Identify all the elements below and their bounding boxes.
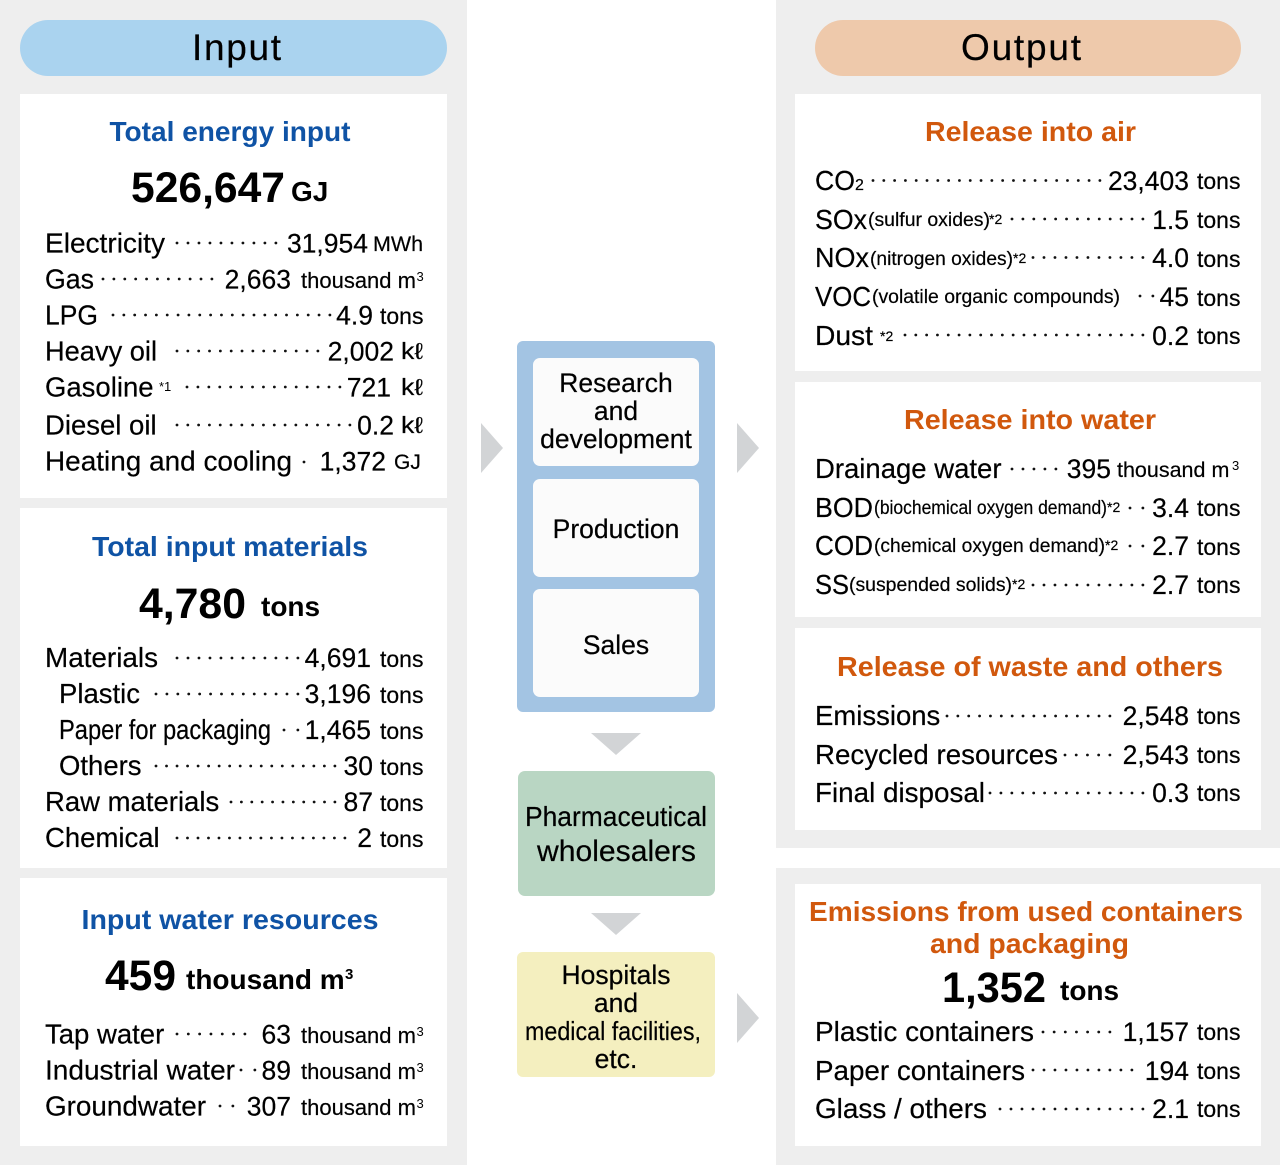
row: tap water: 63	[262, 1020, 291, 1050]
row: chemical: tons	[380, 826, 423, 852]
row: SOx: tons	[1197, 207, 1240, 233]
row: VOC	[815, 281, 1240, 312]
row: NOx: 4.0	[1152, 243, 1189, 273]
row: gasoline: Gasoline	[45, 372, 154, 402]
box: pharmaceutical wholesalers	[518, 771, 715, 896]
heading: input water resources: Input water resources	[82, 904, 378, 935]
row: heavy oil: 2,002	[328, 336, 394, 366]
row: gas	[45, 264, 424, 294]
box: sales	[533, 589, 699, 697]
row: BOD: tons	[1197, 495, 1240, 521]
arrow: business to output	[737, 423, 759, 473]
panel: company activities	[517, 341, 715, 712]
row: COD: COD	[815, 530, 873, 561]
heading: total input materials: Total input materials	[92, 531, 368, 562]
row: recycled resources: 2,543	[1123, 740, 1189, 770]
row: CO2: CO	[815, 165, 855, 196]
row: NOx: *2	[1013, 250, 1026, 266]
row: plastic containers: tons	[1197, 1019, 1240, 1045]
heading: total energy input: Total energy input	[110, 116, 350, 147]
arrow: down to wholesalers	[591, 733, 641, 755]
row: COD	[815, 530, 1240, 561]
box: research and development: and	[594, 396, 638, 426]
heading: release into water: Release into water	[904, 404, 1156, 435]
water total value: thousand m	[186, 964, 345, 995]
emissions total value	[942, 965, 1119, 1012]
heading: Input: Input	[192, 27, 282, 68]
row: dust: 0.2	[1152, 321, 1189, 351]
panel: release of waste and others	[795, 628, 1261, 830]
total energy value: 526,647	[131, 165, 285, 212]
row: COD: *2	[1105, 537, 1118, 553]
row: others	[59, 750, 423, 781]
emissions total value: 1,352	[942, 965, 1046, 1012]
row: CO2	[815, 165, 1240, 196]
row: heavy oil	[45, 336, 424, 366]
row: SS: *2	[1012, 576, 1025, 592]
panel: input water resources	[20, 878, 447, 1146]
box: hospitals and medical facilities: Hospitals	[562, 960, 670, 990]
row: CO2: 23,403	[1108, 166, 1189, 196]
box: hospitals and medical facilities: medical facilities,	[525, 1016, 701, 1046]
row: chemical: 2	[357, 823, 372, 853]
row: gas: Gas	[45, 264, 94, 294]
panel: release into air	[795, 94, 1261, 371]
row: recycled resources	[815, 739, 1240, 770]
row: SOx: SOx	[815, 204, 867, 235]
row: LPG: 4.9	[336, 300, 373, 330]
row: groundwater: Groundwater	[45, 1090, 206, 1122]
row: COD: (chemical oxygen demand)	[874, 536, 1105, 557]
row: industrial water: 89	[262, 1056, 291, 1086]
row: SS: SS	[815, 569, 849, 600]
row: heavy oil: kℓ	[401, 338, 424, 364]
water total value: 459	[105, 953, 176, 1000]
row: emissions: 2,548	[1123, 701, 1189, 731]
heading: Input	[20, 20, 447, 76]
row: VOC: (volatile organic compounds)	[872, 287, 1120, 308]
heading: Output: Output	[961, 27, 1082, 68]
row: final disposal: Final disposal	[815, 777, 985, 808]
row: gas: 3	[416, 269, 424, 284]
row: materials: tons	[380, 646, 423, 672]
row: dust: tons	[1197, 323, 1240, 349]
total materials value	[139, 581, 320, 628]
row: CO2: tons	[1197, 168, 1240, 194]
panel: input background	[0, 0, 467, 1165]
row: plastic	[59, 678, 423, 709]
row: LPG: LPG	[45, 300, 98, 330]
row: industrial water: 3	[416, 1060, 424, 1075]
row: gasoline: kℓ	[401, 374, 424, 400]
heading: release into air: Release into air	[925, 116, 1136, 147]
row: raw materials: 87	[344, 787, 373, 817]
row: industrial water	[45, 1054, 424, 1086]
row: COD: 2.7	[1152, 531, 1189, 561]
heading: emissions from used containers and packaging	[809, 896, 1243, 959]
row: others: 30	[344, 751, 373, 781]
row: electricity: MWh	[373, 233, 423, 256]
box: hospitals and medical facilities: and	[594, 988, 638, 1018]
row: recycled resources: tons	[1197, 742, 1240, 768]
row: glass / others: 2.1	[1152, 1094, 1189, 1124]
row: groundwater	[45, 1090, 424, 1122]
row: SS: 2.7	[1152, 570, 1189, 600]
row: chemical	[45, 822, 423, 853]
heading: emissions from used containers and packaging: and packaging	[930, 928, 1129, 959]
row: tap water: Tap water	[45, 1018, 164, 1050]
row: drainage water: 395	[1067, 454, 1111, 484]
row: others: tons	[380, 754, 423, 780]
row: groundwater: 307	[247, 1092, 291, 1122]
row: plastic: Plastic	[59, 678, 140, 709]
row: final disposal: 0.3	[1152, 778, 1189, 808]
row: plastic: 3,196	[305, 679, 371, 709]
box: production: Production	[553, 514, 679, 544]
row: diesel oil	[45, 410, 424, 440]
row: glass / others: Glass / others	[815, 1093, 987, 1124]
row: drainage water: thousand m	[1117, 458, 1229, 482]
row: heating and cooling	[45, 446, 421, 476]
row: diesel oil: 0.2	[357, 410, 394, 440]
row: gasoline	[45, 372, 424, 402]
row: materials: Materials	[45, 642, 158, 673]
box: hospitals and medical facilities: etc.	[595, 1044, 637, 1074]
total energy value: GJ	[291, 176, 328, 207]
row: BOD: (biochemical oxygen demand)	[874, 498, 1107, 519]
total materials value: tons	[261, 591, 320, 622]
box: research and development: development	[540, 424, 693, 454]
row: groundwater: 3	[416, 1096, 424, 1111]
row: raw materials: tons	[380, 790, 423, 816]
box: research and development: Research	[559, 368, 673, 398]
row: dust: *2	[880, 328, 893, 344]
row: paper for packaging: Paper for packaging	[59, 714, 271, 745]
row: paper for packaging: 1,465	[305, 715, 371, 745]
box: research and development	[533, 358, 699, 466]
row: VOC: tons	[1197, 285, 1240, 311]
total materials value: 4,780	[139, 581, 246, 628]
row: drainage water: 3	[1232, 458, 1239, 473]
panel: release into water	[795, 382, 1261, 617]
row: SOx: (sulfur oxides)	[868, 210, 990, 231]
row: drainage water	[815, 453, 1239, 484]
row: NOx: NOx	[815, 242, 869, 273]
row: gasoline: *1	[159, 379, 171, 394]
arrow: down to hospitals	[591, 913, 641, 935]
row: SS: tons	[1197, 572, 1240, 598]
row: plastic containers	[815, 1016, 1240, 1047]
water total value: 3	[345, 966, 353, 983]
row: NOx: (nitrogen oxides)	[870, 249, 1013, 270]
row: BOD	[815, 492, 1240, 523]
row: NOx: tons	[1197, 246, 1240, 272]
row: NOx	[815, 242, 1240, 273]
row: VOC: VOC	[815, 281, 871, 312]
box: hospitals and medical facilities	[517, 952, 715, 1077]
row: glass / others	[815, 1093, 1240, 1124]
row: heating and cooling: 1,372	[320, 446, 386, 476]
row: BOD: *2	[1107, 499, 1120, 515]
row: paper containers: tons	[1197, 1058, 1240, 1084]
panel: emissions background	[776, 868, 1280, 1165]
heading: release of waste and others: Release of waste and others	[837, 651, 1223, 682]
row: SOx: *2	[989, 211, 1002, 227]
row: emissions: Emissions	[815, 700, 940, 731]
row: paper containers	[815, 1055, 1240, 1086]
row: others: Others	[59, 750, 142, 781]
row: COD: tons	[1197, 534, 1240, 560]
row: paper containers: Paper containers	[815, 1055, 1025, 1086]
row: recycled resources: Recycled resources	[815, 739, 1058, 770]
row: VOC: 45	[1160, 282, 1189, 312]
row: electricity	[45, 228, 423, 258]
row: chemical: Chemical	[45, 822, 160, 853]
row: SOx	[815, 204, 1240, 235]
heading: emissions from used containers and packaging: Emissions from used containers	[809, 896, 1243, 927]
row: tap water	[45, 1018, 424, 1050]
row: final disposal	[815, 777, 1240, 808]
row: SS: (suspended solids)	[849, 575, 1012, 596]
emissions total value: tons	[1060, 975, 1119, 1006]
row: diesel oil: kℓ	[401, 412, 424, 438]
box: production	[533, 479, 699, 577]
panel: total energy input	[20, 94, 447, 498]
row: electricity: 31,954	[287, 228, 368, 258]
row: materials: 4,691	[305, 643, 371, 673]
row: materials	[45, 642, 423, 673]
row: glass / others: tons	[1197, 1096, 1240, 1122]
row: paper for packaging	[59, 714, 423, 745]
row: paper for packaging: tons	[380, 718, 423, 744]
panel: total input materials	[20, 508, 447, 868]
heading: Output	[815, 20, 1241, 76]
row: heating and cooling: Heating and cooling	[45, 446, 292, 476]
row: gasoline: 721	[347, 372, 391, 402]
row: plastic containers: Plastic containers	[815, 1016, 1034, 1047]
arrow: hospitals to emissions	[737, 993, 759, 1043]
row: paper containers: 194	[1145, 1056, 1189, 1086]
row: drainage water: Drainage water	[815, 453, 1001, 484]
row: BOD: BOD	[815, 492, 873, 523]
box: pharmaceutical wholesalers: wholesalers	[536, 835, 696, 868]
row: gas: thousand m	[301, 268, 416, 293]
row: industrial water: thousand m	[301, 1059, 416, 1084]
row: emissions	[815, 700, 1240, 731]
row: dust	[815, 320, 1240, 351]
arrow: input to business	[481, 423, 503, 473]
panel: emissions from used containers and packaging	[795, 884, 1261, 1146]
row: industrial water: Industrial water	[45, 1054, 235, 1086]
row: plastic: tons	[380, 682, 423, 708]
row: final disposal: tons	[1197, 780, 1240, 806]
box: sales: Sales	[583, 630, 649, 660]
row: SOx: 1.5	[1152, 205, 1189, 235]
row: BOD: 3.4	[1152, 493, 1189, 523]
row: tap water: thousand m	[301, 1023, 416, 1048]
water total value	[105, 953, 353, 1000]
row: electricity: Electricity	[45, 228, 165, 258]
row: heavy oil: Heavy oil	[45, 336, 157, 366]
row: LPG	[45, 300, 423, 330]
row: LPG: tons	[380, 303, 423, 329]
row: dust: Dust	[815, 320, 873, 351]
row: diesel oil: Diesel oil	[45, 410, 157, 440]
row: groundwater: thousand m	[301, 1095, 416, 1120]
row: heating and cooling: GJ	[394, 451, 421, 474]
box: pharmaceutical wholesalers: Pharmaceutical	[525, 801, 707, 832]
row: emissions: tons	[1197, 703, 1240, 729]
row: tap water: 3	[416, 1024, 424, 1039]
row: raw materials	[45, 786, 423, 817]
row: raw materials: Raw materials	[45, 786, 219, 817]
row: SS	[815, 569, 1240, 600]
row: gas: 2,663	[225, 264, 291, 294]
panel: output background	[776, 0, 1280, 848]
row: plastic containers: 1,157	[1123, 1017, 1189, 1047]
row: CO2: 2	[855, 177, 864, 194]
